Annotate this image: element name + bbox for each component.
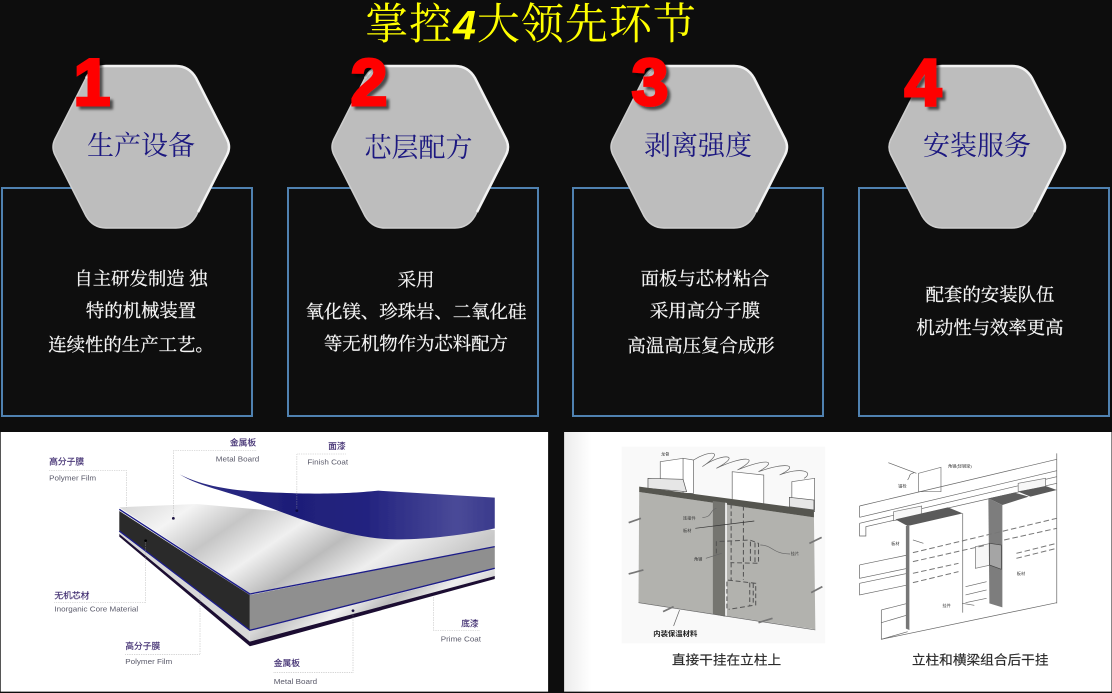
hexagon 3: 剥离强度 — [644, 131, 752, 161]
hexagon 4: 安装服务 — [923, 131, 1031, 161]
text box 1: 特的机械装置 — [86, 301, 196, 321]
label: polymer film bottom: 高分子膜 — [125, 640, 161, 651]
text box 3: 采用高分子膜 — [650, 301, 760, 321]
hexagon 1: 生产设备 — [87, 131, 195, 161]
label: polymer film top — [49, 456, 126, 507]
label: polymer film top: Polymer Film — [49, 474, 97, 482]
label: finish coat — [295, 440, 349, 512]
panel: installation diagrams — [564, 432, 1112, 692]
number 2: 2 — [351, 45, 387, 119]
left small labels: 角钢 — [694, 555, 702, 561]
right small labels: 锚栓 — [898, 482, 907, 488]
label: inorganic core: Inorganic Core Material — [54, 605, 138, 614]
number 1: 1 — [74, 45, 110, 119]
label: polymer film bottom — [125, 592, 200, 666]
label: metal board top — [172, 437, 259, 520]
left caption: 直接干挂在立柱上 — [672, 652, 781, 667]
text box 2: 等无机物作为芯料配方 — [324, 334, 508, 354]
panel: 生产设备 — [2, 45, 252, 416]
text box 3: 高温高压复合成形 — [627, 336, 775, 356]
text box 2: 采用 — [398, 270, 434, 290]
title: 掌控4大领先环节 — [365, 1, 697, 49]
right caption: 立柱和横梁组合后干挂 — [912, 653, 1049, 667]
left diagram — [622, 447, 825, 643]
hexagon 1 — [53, 66, 229, 228]
label: metal board bottom: Metal Board — [274, 677, 317, 686]
number 4: 4 — [905, 45, 942, 119]
panel: composite board diagram — [1, 432, 548, 692]
left small labels: 连接件 — [683, 514, 696, 520]
label: finish coat: Finish Coat — [307, 458, 349, 466]
left small labels: 板材 — [683, 527, 691, 533]
right small labels: 板材 — [891, 540, 900, 546]
text box 1: 连续性的生产工艺。 — [48, 335, 214, 355]
text box 4: 机动性与效率更高 — [916, 318, 1064, 338]
hexagon 2 — [332, 66, 508, 228]
label: finish coat: 面漆 — [328, 440, 346, 451]
right diagram — [860, 453, 1057, 639]
text box 3: 面板与芯材粘合 — [641, 269, 769, 289]
label: inorganic core — [54, 539, 147, 614]
label: prime coat: Prime Coat — [441, 635, 482, 644]
left small labels: 龙骨 — [661, 451, 669, 457]
label: metal board bottom — [274, 609, 354, 686]
right small labels — [891, 463, 1025, 608]
label: polymer film top: 高分子膜 — [49, 456, 85, 467]
panel: 剥离强度 — [573, 45, 823, 416]
left small labels: 挂片 — [791, 550, 799, 556]
board layers — [119, 474, 495, 646]
hexagon 4 — [889, 66, 1065, 228]
text box 4: 配套的安装队伍 — [926, 285, 1054, 305]
right small labels: 角钢(轻钢梁) — [948, 463, 972, 469]
text box 1 — [2, 188, 252, 416]
text box 2 — [288, 188, 538, 416]
label: polymer film bottom: Polymer Film — [125, 657, 173, 666]
label: metal board top: 金属板 — [230, 437, 257, 447]
panel: 安装服务 — [859, 45, 1109, 416]
text box 4 — [859, 188, 1109, 416]
number 3: 3 — [632, 45, 668, 119]
left small labels — [661, 451, 799, 561]
label: metal board bottom: 金属板 — [274, 657, 300, 668]
label: prime coat: 底漆 — [461, 618, 479, 628]
left inner caption: 内装保温材料 — [653, 629, 697, 638]
hexagon 2: 芯层配方 — [364, 133, 472, 163]
panel: 芯层配方 — [288, 45, 538, 416]
label: prime coat — [433, 597, 482, 644]
right small labels: 挂件 — [942, 602, 951, 608]
text box 2: 氧化镁、珍珠岩、二氧化硅 — [306, 302, 526, 322]
label: inorganic core: 无机芯材 — [54, 590, 90, 600]
hexagon 3 — [611, 66, 787, 228]
text box 1: 自主研发制造 独 — [74, 269, 209, 289]
label: metal board top: Metal Board — [216, 455, 259, 464]
right small labels: 板材 — [1017, 570, 1025, 576]
text box 3 — [573, 188, 823, 416]
